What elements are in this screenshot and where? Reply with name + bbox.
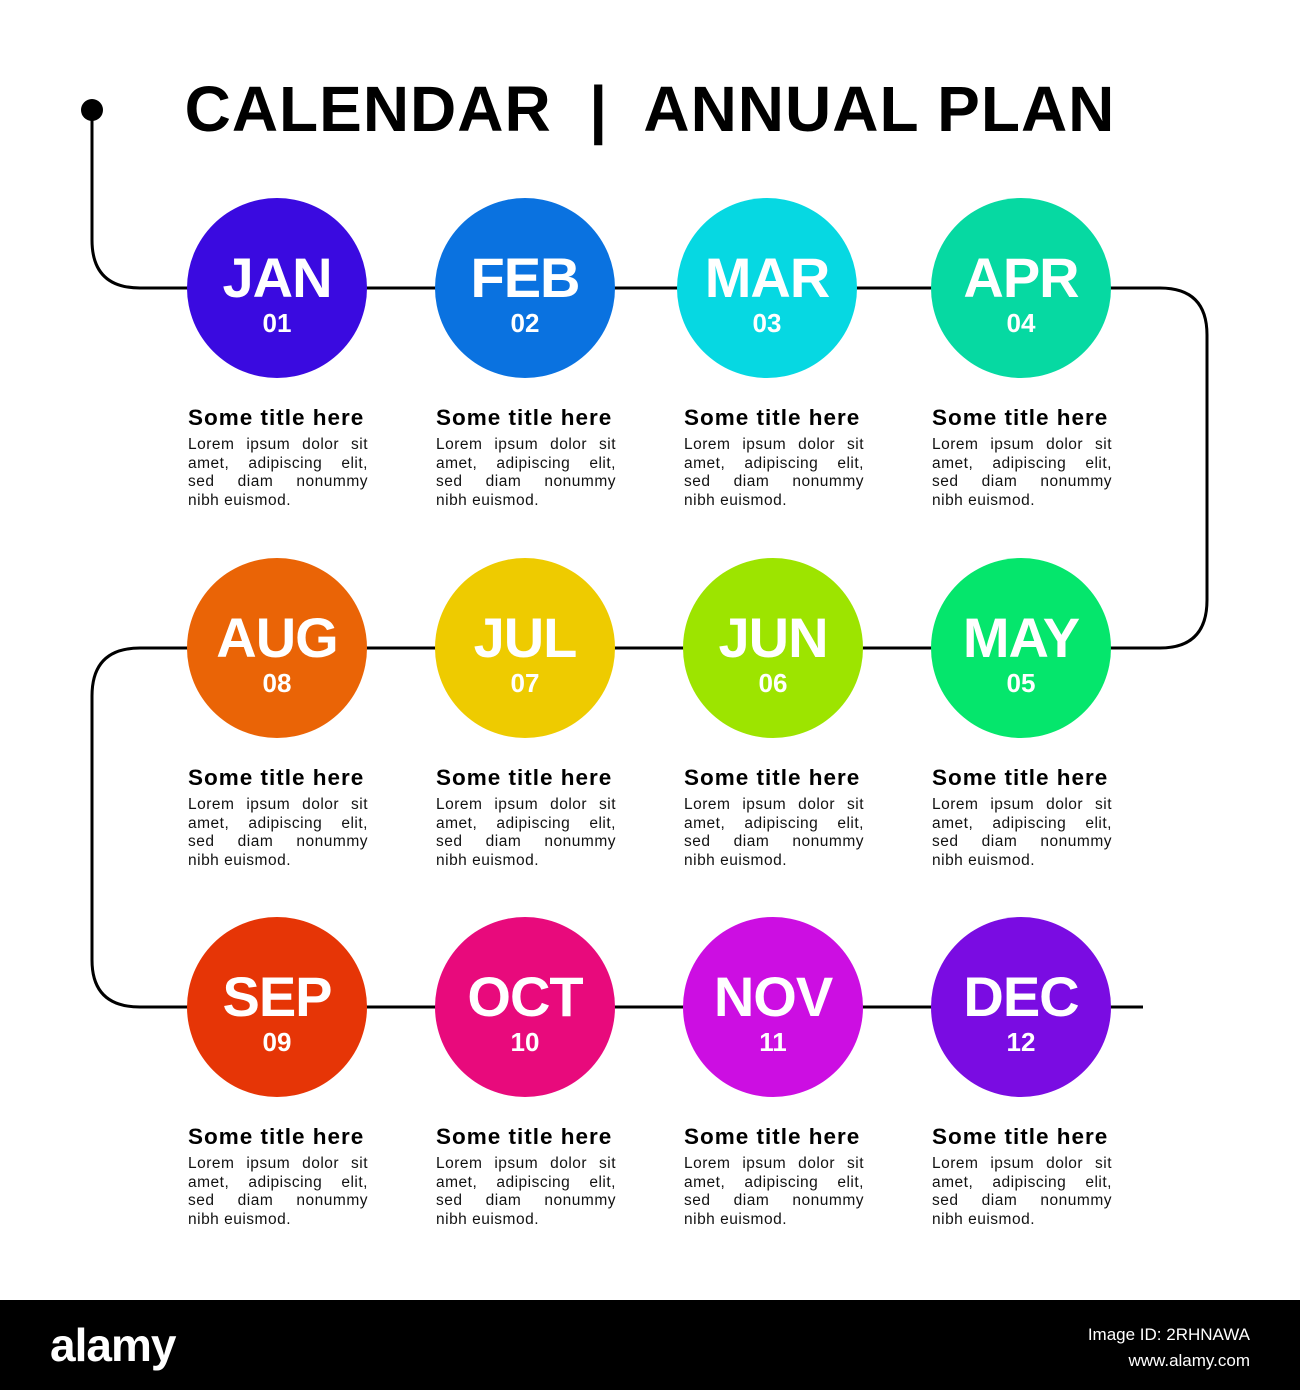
footer bar: Image ID: 2RHNAWA (1088, 1325, 1250, 1344)
text: AUG: nibh euismod. (188, 852, 291, 869)
text: APR: nibh euismod. (932, 492, 1035, 509)
text: JUL: nibh euismod. (436, 852, 539, 869)
text: DEC: Lorem ipsum dolor sit (932, 1155, 1112, 1172)
circle: OCT (435, 917, 615, 1097)
text: JAN: Lorem ipsum dolor sit (188, 436, 368, 453)
circle: JUL: 07 (511, 668, 539, 698)
circle: SEP: 09 (263, 1027, 291, 1057)
text: JAN: amet, adipiscing elit, (188, 455, 368, 472)
text: MAR: amet, adipiscing elit, (684, 455, 864, 472)
text: JUL (436, 765, 616, 869)
circle: JUN: JUN (718, 606, 828, 669)
circle: OCT: OCT (467, 965, 583, 1028)
circle: MAY: 05 (1007, 668, 1035, 698)
text: DEC: amet, adipiscing elit, (932, 1174, 1112, 1191)
text: NOV: Some title here (684, 1124, 860, 1149)
circle: APR: APR (963, 246, 1079, 309)
circle: JAN: JAN (222, 246, 332, 309)
text: DEC: nibh euismod. (932, 1211, 1035, 1228)
text: MAY: Lorem ipsum dolor sit (932, 796, 1112, 813)
text: JAN: nibh euismod. (188, 492, 291, 509)
circle: AUG: 08 (263, 668, 291, 698)
text: OCT: sed diam nonummy (436, 1192, 616, 1209)
circle: JAN: 01 (263, 308, 291, 338)
text: JUN: Some title here (684, 765, 860, 790)
footer bar (0, 1300, 1300, 1390)
text: APR: amet, adipiscing elit, (932, 455, 1112, 472)
text: APR: Lorem ipsum dolor sit (932, 436, 1112, 453)
text: DEC: sed diam nonummy (932, 1192, 1112, 1209)
circle: FEB (435, 198, 615, 378)
text: SEP: nibh euismod. (188, 1211, 291, 1228)
text: FEB: sed diam nonummy (436, 473, 616, 490)
circle: SEP (187, 917, 367, 1097)
text: APR: sed diam nonummy (932, 473, 1112, 490)
text: SEP: sed diam nonummy (188, 1192, 368, 1209)
circle: AUG (187, 558, 367, 738)
circle: JUL (435, 558, 615, 738)
text: FEB: Some title here (436, 405, 612, 430)
circle: MAR (677, 198, 857, 378)
text: NOV (684, 1124, 864, 1228)
text: JUN: sed diam nonummy (684, 833, 864, 850)
text: JUL: sed diam nonummy (436, 833, 616, 850)
circle: JUN: 06 (759, 668, 787, 698)
title: CALENDAR | ANNUAL PLAN (185, 73, 1115, 145)
text: NOV: Lorem ipsum dolor sit (684, 1155, 864, 1172)
text: FEB: nibh euismod. (436, 492, 539, 509)
circle: MAR: 03 (753, 308, 781, 338)
circle: DEC: 12 (1007, 1027, 1035, 1057)
text: NOV: amet, adipiscing elit, (684, 1174, 864, 1191)
text: JAN: sed diam nonummy (188, 473, 368, 490)
text: JUN: Lorem ipsum dolor sit (684, 796, 864, 813)
text: JAN (188, 405, 368, 509)
text: NOV: sed diam nonummy (684, 1192, 864, 1209)
text: MAY: amet, adipiscing elit, (932, 815, 1112, 832)
text: SEP: amet, adipiscing elit, (188, 1174, 368, 1191)
text: AUG: Lorem ipsum dolor sit (188, 796, 368, 813)
text: MAR: Lorem ipsum dolor sit (684, 436, 864, 453)
text: DEC: Some title here (932, 1124, 1108, 1149)
circle: JUL: JUL (474, 606, 576, 669)
text: MAR (684, 405, 864, 509)
text: MAR: nibh euismod. (684, 492, 787, 509)
text: JAN: Some title here (188, 405, 364, 430)
circle: MAR: MAR (705, 246, 829, 309)
text: SEP: Some title here (188, 1124, 364, 1149)
circle: OCT: 10 (511, 1027, 539, 1057)
circle: NOV: 11 (759, 1027, 787, 1057)
circle: JAN (187, 198, 367, 378)
text: MAR: Some title here (684, 405, 860, 430)
text: JUL: Lorem ipsum dolor sit (436, 796, 616, 813)
text: APR (932, 405, 1112, 509)
text: JUL: Some title here (436, 765, 612, 790)
text: MAY: sed diam nonummy (932, 833, 1112, 850)
circle: SEP: SEP (222, 965, 332, 1028)
text: OCT: nibh euismod. (436, 1211, 539, 1228)
footer bar: alamy (50, 1319, 175, 1371)
text: AUG (188, 765, 368, 869)
text: AUG: amet, adipiscing elit, (188, 815, 368, 832)
footer bar: www.alamy.com (1128, 1351, 1250, 1370)
text: FEB: Lorem ipsum dolor sit (436, 436, 616, 453)
text: FEB: amet, adipiscing elit, (436, 455, 616, 472)
circle: APR: 04 (1007, 308, 1035, 338)
text: OCT (436, 1124, 616, 1228)
text: JUN: amet, adipiscing elit, (684, 815, 864, 832)
text: DEC (932, 1124, 1112, 1228)
text: MAR: sed diam nonummy (684, 473, 864, 490)
circle: DEC: DEC (963, 965, 1079, 1028)
circle: MAY (931, 558, 1111, 738)
text: MAY: nibh euismod. (932, 852, 1035, 869)
circle: NOV: NOV (714, 965, 832, 1028)
text: OCT: Some title here (436, 1124, 612, 1149)
text: SEP: Lorem ipsum dolor sit (188, 1155, 368, 1172)
text: SEP (188, 1124, 368, 1228)
circle: NOV (683, 917, 863, 1097)
text: JUN: nibh euismod. (684, 852, 787, 869)
text: OCT: Lorem ipsum dolor sit (436, 1155, 616, 1172)
circle: FEB: FEB (470, 246, 580, 309)
text: MAY (932, 765, 1112, 869)
circle: AUG: AUG (216, 606, 338, 669)
circle: MAY: MAY (963, 606, 1079, 669)
text: JUL: amet, adipiscing elit, (436, 815, 616, 832)
text: AUG: Some title here (188, 765, 364, 790)
text: NOV: nibh euismod. (684, 1211, 787, 1228)
circle: APR (931, 198, 1111, 378)
text: JUN (684, 765, 864, 869)
text: APR: Some title here (932, 405, 1108, 430)
circle: FEB: 02 (511, 308, 539, 338)
text: AUG: sed diam nonummy (188, 833, 368, 850)
text: FEB (436, 405, 616, 509)
text: MAY: Some title here (932, 765, 1108, 790)
circle: JUN (683, 558, 863, 738)
circle: DEC (931, 917, 1111, 1097)
text: OCT: amet, adipiscing elit, (436, 1174, 616, 1191)
